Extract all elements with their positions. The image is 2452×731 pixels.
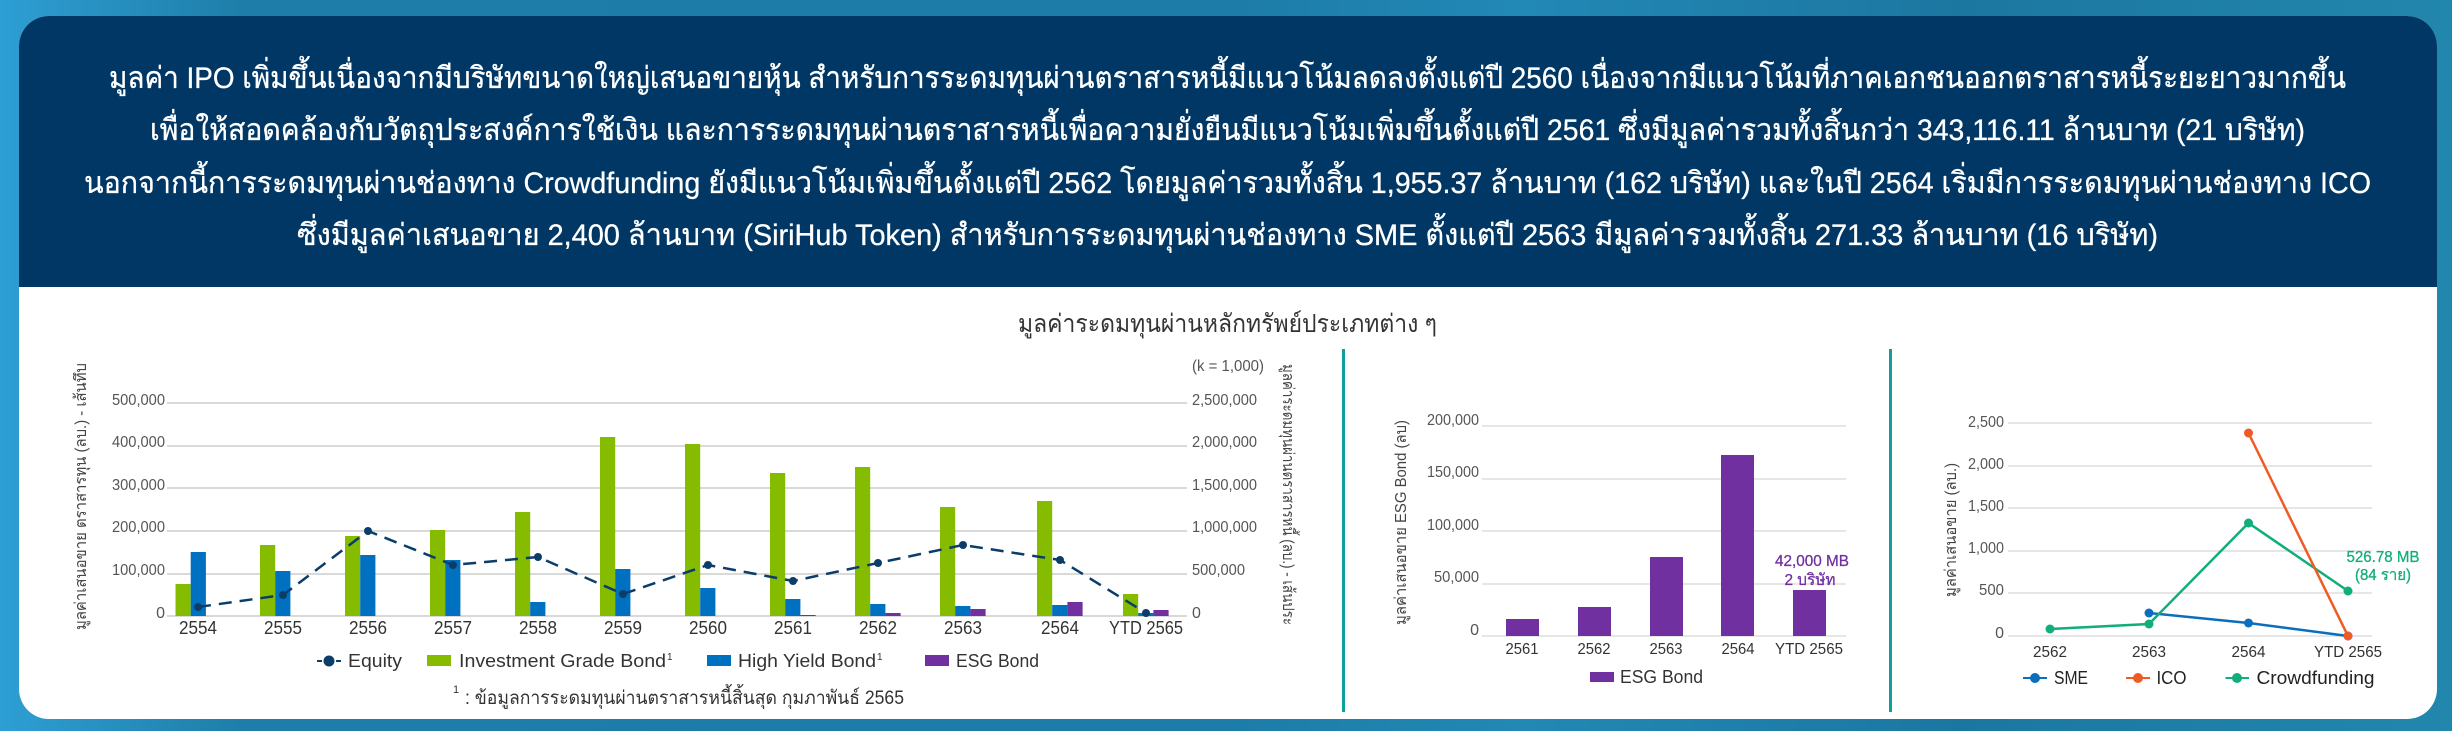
callout: 42,000 MB <box>1775 553 1849 589</box>
x axis labels: 2557 <box>434 618 472 638</box>
legend: ESG Bond <box>1620 667 1703 687</box>
x axis labels: YTD 2565 <box>2314 644 2382 661</box>
text block: summary paragraph: ซึ่งมีมูลค่าเสนอขาย 2,400 ล้านบาท (SiriHub Token) สำหรับการระดมทุนผ่านช่องทาง SME ตั้งแต่ปี 2563 มีมูลค่ารวมทั้งสิ้น 271.33 ล้านบาท (16 บริษัท) <box>297 213 2158 254</box>
left axis labels: 100,000 <box>112 562 165 579</box>
x axis labels: 2564 <box>1722 641 1755 658</box>
left axis labels <box>112 392 165 622</box>
x axis labels: 2563 <box>944 618 982 638</box>
x axis labels: 2562 <box>1578 641 1611 658</box>
legend: SME <box>2054 668 2088 688</box>
y axis labels: 150,000 <box>1427 464 1479 481</box>
y axis title: มูลค่าเสนอขาย (ลบ.) <box>1943 463 1961 597</box>
callout: 42,000 MB: 2 บริษัท <box>1784 572 1836 589</box>
divider right <box>1889 349 1892 712</box>
right axis labels: 2,000,000 <box>1192 434 1257 451</box>
y axis labels <box>1427 412 1479 639</box>
x axis labels: 2561 <box>1506 641 1539 658</box>
x axis labels <box>2033 644 2382 661</box>
x axis labels <box>179 618 1183 638</box>
y axis labels: 2,000 <box>1968 456 2004 473</box>
legend: 1 <box>877 652 883 663</box>
x axis labels: 2562 <box>859 618 897 638</box>
left axis labels: 400,000 <box>112 434 165 451</box>
x axis labels: 2559 <box>604 618 642 638</box>
y axis labels: 1,000 <box>1968 540 2004 557</box>
callout: 526.78 MB <box>2346 549 2420 584</box>
right axis labels: 1,500,000 <box>1192 477 1257 494</box>
x axis labels: 2563 <box>2132 644 2166 661</box>
ICO line <box>2244 428 2352 640</box>
y axis title: มูลค่าเสนอขาย ESG Bond (ลบ) <box>1393 420 1411 625</box>
y axis labels: 100,000 <box>1427 517 1479 534</box>
divider left <box>1342 349 1345 712</box>
left axis title: มูลค่าเสนอขาย ตราสารทุน (ลบ.) - เส้นทึบ <box>72 363 91 630</box>
right axis labels: 0 <box>1192 605 1201 622</box>
Crowdfunding line <box>2046 518 2352 634</box>
x axis labels: 2556 <box>349 618 387 638</box>
footnote: : ข้อมูลการระดมทุนผ่านตราสารหนี้สิ้นสุด กุมภาพันธ์ 2565 <box>465 684 904 710</box>
left axis labels: 0 <box>156 605 165 622</box>
x axis labels: 2560 <box>689 618 727 638</box>
left axis labels: 300,000 <box>112 477 165 494</box>
text block: summary paragraph: เพื่อให้สอดคล้องกับวัตถุประสงค์การใช้เงิน และการระดมทุนผ่านตราสารหนี้เพื่อความยั่งยืนมีแนวโน้มเพิ่มขึ้นตั้งแต่ปี 2561 ซึ่งมีมูลค่ารวมทั้งสิ้นกว่า 343,116.11 ล้านบาท (21 บริษัท) <box>150 108 2305 149</box>
legend <box>317 651 1039 671</box>
legend: ESG Bond <box>956 651 1039 671</box>
y axis labels: 50,000 <box>1434 569 1479 586</box>
right axis labels: (k = 1,000) <box>1192 358 1264 375</box>
left axis labels: 500,000 <box>112 392 165 409</box>
chart: SME, ICO, Crowdfunding lines <box>1943 414 2420 688</box>
x axis labels: YTD 2565 <box>1775 641 1843 658</box>
y axis labels: 2,500 <box>1968 414 2004 431</box>
callout: 526.78 MB: 526.78 MB <box>2346 549 2420 566</box>
legend: Investment Grade Bond <box>459 651 666 671</box>
x axis labels: 2562 <box>2033 644 2067 661</box>
x axis labels: 2564 <box>2232 644 2266 661</box>
legend: 1 <box>667 652 673 663</box>
x axis labels: YTD 2565 <box>1109 618 1183 638</box>
panel: header summary <box>19 16 2437 287</box>
x axis labels <box>1506 641 1843 658</box>
callout: 526.78 MB: (84 ราย) <box>2355 567 2411 584</box>
text block: summary paragraph <box>84 56 2371 254</box>
x axis labels: 2555 <box>264 618 302 638</box>
investment grade bond bars <box>176 437 1138 616</box>
y axis labels: 0 <box>1470 622 1479 639</box>
legend: Crowdfunding <box>2256 668 2374 688</box>
y axis labels: 1,500 <box>1968 498 2004 515</box>
right axis labels: 500,000 <box>1192 562 1245 579</box>
callout: 42,000 MB: 42,000 MB <box>1775 553 1849 570</box>
legend: Equity <box>348 651 402 671</box>
legend: ICO <box>2156 668 2186 688</box>
footnote: 1 <box>453 684 459 696</box>
x axis labels: 2561 <box>774 618 812 638</box>
ESG bond bars <box>800 602 1169 616</box>
y axis labels: 200,000 <box>1427 412 1479 429</box>
y axis labels <box>1968 414 2004 642</box>
equity dashed line <box>194 527 1150 617</box>
x axis labels: 2563 <box>1650 641 1683 658</box>
x axis labels: 2564 <box>1041 618 1079 638</box>
x axis labels: 2554 <box>179 618 217 638</box>
legend <box>2023 668 2374 688</box>
SME line <box>2144 608 2352 640</box>
text block: summary paragraph: นอกจากนี้การระดมทุนผ่านช่องทาง Crowdfunding ยังมีแนวโน้มเพิ่มขึ้นตั้งแต่ปี 2562 โดยมูลค่ารวมทั้งสิ้น 1,955.37 ล้านบาท (162 บริษัท) และในปี 2564 เริ่มมีการระดมทุนผ่านช่องทาง ICO <box>84 161 2371 202</box>
right axis labels: 2,500,000 <box>1192 392 1257 409</box>
high yield bond bars <box>191 552 1153 616</box>
right axis labels: 1,000,000 <box>1192 519 1257 536</box>
heading: chart section title: มูลค่าระดมทุนผ่านหลักทรัพย์ประเภทต่าง ๆ <box>1018 310 1437 339</box>
x axis labels: 2558 <box>519 618 557 638</box>
right axis title: มูลค่าระดมทุนผ่านตราสารหนี้ (ลบ.) - เส้นประ <box>1278 364 1300 625</box>
y axis labels: 500 <box>1979 582 2004 599</box>
text block: summary paragraph: มูลค่า IPO เพิ่มขึ้นเนื่องจากมีบริษัทขนาดใหญ่เสนอขายหุ้น สำหรับการระดมทุนผ่านตราสารหนี้มีแนวโน้มลดลงตั้งแต่ปี 2560 เนื่องจากมีแนวโน้มที่ภาคเอกชนออกตราสารหนี้ระยะยาวมากขึ้น <box>109 56 2346 97</box>
y axis labels: 0 <box>1995 625 2004 642</box>
right axis labels <box>1192 358 1264 622</box>
left axis labels: 200,000 <box>112 519 165 536</box>
chart: combined fundraising bars and equity line <box>72 358 1300 710</box>
legend: High Yield Bond <box>738 651 876 671</box>
ESG bars <box>1506 455 1826 636</box>
chart: ESG bond bars <box>1393 412 1849 687</box>
